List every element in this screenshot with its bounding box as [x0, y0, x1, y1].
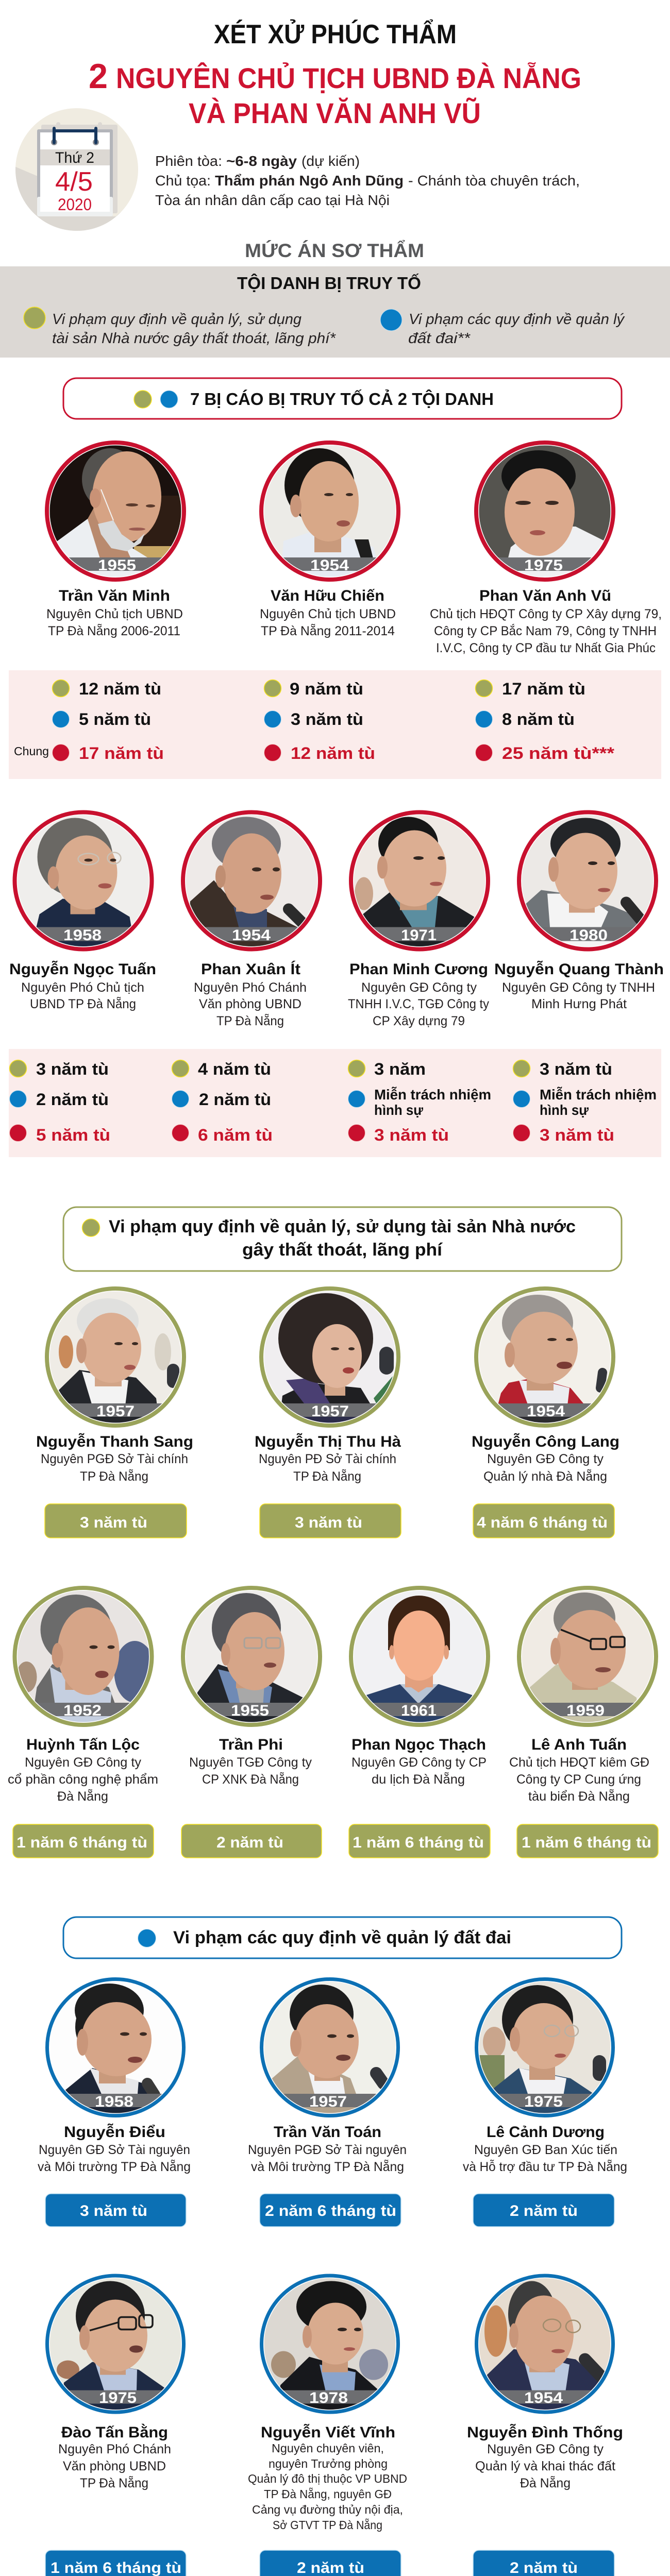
role: [509, 1755, 649, 1804]
portrait photo: [261, 1289, 398, 1426]
role: Nguyên Chủ tịch UBND: [260, 607, 396, 621]
role: [463, 2143, 627, 2174]
portrait photo: [476, 2276, 613, 2412]
sentence badge: [260, 2550, 401, 2576]
session info text: Chủ tọa:: [155, 173, 211, 189]
role: Công ty CP Cung ứng: [516, 1772, 641, 1787]
sentence badge: [260, 2194, 401, 2227]
portrait photo: [14, 1588, 156, 1725]
section header: state asset violations: Vi phạm quy định về quản lý, sử dụng tài sản Nhà nước: [109, 1217, 576, 1236]
birth year: 1955: [231, 1702, 269, 1719]
portrait photo: [183, 812, 320, 949]
role: CP Xây dựng 79: [373, 1014, 465, 1028]
role: TP Đà Nẵng 2006-2011: [48, 623, 180, 638]
role: cổ phần công nghệ phẩm: [8, 1772, 158, 1787]
role: Nguyên GĐ Công ty: [361, 980, 477, 995]
role: Nguyên Chủ tịch UBND: [46, 607, 183, 621]
person: Lê Cảnh Dương: [463, 1979, 627, 2227]
birth year: 1954: [310, 557, 349, 574]
name: Nguyễn Quang Thành: [494, 960, 664, 978]
sentence badge: 4 năm 6 tháng tù: [477, 1514, 608, 1531]
role: tàu biển Đà Nẵng: [528, 1789, 630, 1804]
role: Đà Nẵng: [57, 1789, 108, 1804]
person: Phan Minh Cương: [348, 812, 489, 1028]
role: Quản lý nhà Đà Nẵng: [483, 1469, 607, 1484]
person: Phan Ngọc Thạch: [349, 1588, 490, 1858]
person: Nguyễn Thị Thu Hà: [255, 1289, 401, 1538]
name: Nguyễn Điểu: [64, 2123, 165, 2141]
sentence badge: 3 năm tù: [80, 2202, 147, 2219]
role: Nguyên GĐ Công ty: [25, 1755, 142, 1770]
role: Cảng vụ đường thủy nội địa,: [252, 2503, 403, 2516]
sentences: Trần Văn Minh: 17 năm tù: [79, 744, 164, 762]
role: Nguyên Phó Chánh: [194, 980, 307, 995]
sentence badge: 3 năm tù: [295, 1514, 362, 1531]
role: Nguyên GĐ Ban Xúc tiến: [474, 2143, 617, 2157]
role: [194, 980, 307, 1028]
sentences: Trần Văn Minh: 12 năm tù: [79, 680, 161, 698]
role: [483, 1452, 607, 1484]
person: Đào Tấn Bằng: [45, 2276, 186, 2576]
birth year: 1952: [63, 1702, 102, 1719]
section header: state asset violations: [63, 1207, 622, 1271]
sentence badge: 1 năm 6 tháng tù: [353, 1834, 484, 1851]
name: Lê Cảnh Dương: [487, 2124, 605, 2141]
person: Nguyễn Đình Thống: [467, 2276, 623, 2576]
role: [189, 1755, 312, 1787]
role: Nguyên Phó Chủ tịch: [21, 980, 144, 995]
sentence badge: [260, 1504, 401, 1538]
sentences: Nguyễn Quang Thành: Miễn trách nhiệm: [540, 1087, 657, 1103]
role: Nguyên GĐ Công ty TNHH: [502, 980, 655, 995]
role: Nguyên GĐ Công ty: [487, 1452, 604, 1466]
birth year: 1959: [566, 1702, 605, 1719]
role: và Môi trường TP Đà Nẵng: [38, 2159, 191, 2174]
sentences: Phan Minh Cương: 3 năm: [374, 1060, 426, 1078]
role: Nguyên GĐ Công ty CP: [351, 1755, 487, 1770]
sentence badge: [45, 1504, 187, 1538]
session info text: - Chánh tòa chuyên trách,: [408, 173, 580, 189]
role: TP Đà Nẵng: [216, 1013, 284, 1028]
role: Nguyên chuyên viên,: [272, 2442, 384, 2455]
sentence badge: [473, 2194, 614, 2227]
session info text: Thẩm phán Ngô Anh Dũng: [215, 173, 404, 189]
person: Huỳnh Tấn Lộc: [8, 1588, 158, 1858]
sentences: Nguyễn Ngọc Tuấn: 2 năm tù: [36, 1090, 109, 1109]
portrait photo: [476, 443, 613, 580]
session info text: [155, 153, 580, 208]
birth year: 1954: [232, 927, 271, 944]
panel: charges legend: [0, 266, 670, 358]
person: Nguyễn Thanh Sang: [36, 1289, 193, 1538]
role: Sở GTVT TP Đà Nẵng: [273, 2518, 382, 2532]
person: Phan Xuân Ít: [183, 812, 320, 1028]
role: du lịch Đà Nẵng: [372, 1772, 465, 1787]
role: CP XNK Đà Nẵng: [202, 1772, 299, 1787]
birth year: 1958: [95, 2093, 133, 2110]
name: Nguyễn Thị Thu Hà: [255, 1433, 401, 1450]
role: [430, 607, 662, 655]
birth year: 1978: [309, 2389, 348, 2406]
icon: calendar: 4/5: [55, 167, 93, 197]
sentences: Nguyễn Quang Thành: hình sự: [540, 1102, 589, 1118]
sentences: Văn Hữu Chiến: 3 năm tù: [291, 710, 363, 728]
sentences: Phan Minh Cương: Miễn trách nhiệm: [374, 1087, 491, 1103]
title line: red 2: VÀ PHAN VĂN ANH VŨ: [189, 97, 481, 129]
sentence badge: [45, 2550, 186, 2576]
portrait photo: [262, 2276, 398, 2412]
name: Phan Ngọc Thạch: [351, 1736, 486, 1753]
birth year: 1980: [569, 927, 608, 944]
name: Nguyễn Viết Vĩnh: [261, 2424, 395, 2441]
sentences: Phan Văn Anh Vũ: 8 năm tù: [502, 710, 575, 728]
panel: charges legend: tài sản Nhà nước gây thất thoát, lãng phí*: [52, 330, 337, 347]
name: Phan Minh Cương: [349, 961, 488, 978]
role: TP Đà Nẵng 2011-2014: [261, 623, 395, 638]
portrait photo: [47, 443, 184, 580]
name: Phan Văn Anh Vũ: [479, 587, 611, 604]
icon: calendar: 2020: [58, 195, 92, 214]
sentences: Nguyễn Quang Thành: 3 năm tù: [540, 1126, 614, 1144]
sentence badge: [13, 1824, 154, 1858]
birth year: 1971: [401, 927, 437, 944]
sentences: Phan Văn Anh Vũ: 25 năm tù***: [502, 744, 615, 762]
panel: sentences, row of 3: [9, 670, 661, 779]
role: Nguyên GĐ Công ty: [487, 2442, 604, 2456]
sentences: Trần Văn Minh: 5 năm tù: [79, 710, 151, 728]
role: [8, 1755, 158, 1804]
birth year: 1961: [401, 1702, 437, 1719]
name: Trần Văn Toán: [274, 2124, 381, 2141]
sentence badge: 2 năm 6 tháng tù: [265, 2202, 396, 2219]
section header: land management violations: Vi phạm các quy định về quản lý đất đai: [173, 1928, 511, 1947]
birth year: 1975: [524, 557, 563, 574]
portrait photo: [351, 812, 488, 949]
title numeral: 2: [89, 57, 108, 96]
name: Đào Tấn Bằng: [61, 2424, 168, 2441]
role: [248, 2442, 407, 2532]
person: Trần Văn Minh: [46, 443, 184, 638]
role: Văn phòng UBND: [199, 997, 301, 1011]
role: Chủ tịch HĐQT kiêm GĐ: [509, 1755, 649, 1770]
section header: both charges: 7 BỊ CÁO BỊ TRUY TỐ CẢ 2 TỘI DANH: [190, 389, 494, 409]
sentences: Nguyễn Ngọc Tuấn: 3 năm tù: [36, 1060, 109, 1078]
heading: first-instance sentences: MỨC ÁN SƠ THẨM: [245, 240, 424, 261]
role: TNHH I.V.C, TGĐ Công ty: [348, 997, 489, 1011]
session info text: Phiên tòa:: [155, 153, 222, 169]
name: Trần Văn Minh: [59, 587, 170, 604]
sentence badge: 3 năm tù: [80, 1514, 147, 1531]
title line: black: XÉT XỬ PHÚC THẨM: [214, 19, 457, 49]
role: Nguyên TGĐ Công ty: [189, 1755, 312, 1770]
sentence badge: [349, 1824, 490, 1858]
role: TP Đà Nẵng, nguyên GĐ: [264, 2487, 392, 2501]
person: Nguyễn Ngọc Tuấn: [9, 812, 156, 1011]
birth year: 1954: [524, 2389, 563, 2406]
sentences: Phan Văn Anh Vũ: 17 năm tù: [502, 680, 585, 698]
section header: land management violations: [63, 1917, 622, 1958]
role: [260, 607, 396, 638]
role: [38, 2143, 191, 2174]
sentence badge: [473, 1504, 614, 1538]
sentences: Văn Hữu Chiến: 9 năm tù: [290, 680, 363, 698]
birth year: 1957: [309, 2093, 347, 2110]
sentence badge: 2 năm tù: [216, 1834, 283, 1851]
birth year: 1957: [311, 1403, 349, 1420]
person: Văn Hữu Chiến: [260, 443, 398, 638]
panel: charges legend: Vi phạm các quy định về quản lý: [409, 311, 625, 328]
birth year: 1975: [99, 2389, 137, 2406]
role: [248, 2143, 407, 2174]
sentences: Phan Minh Cương: [348, 1060, 491, 1144]
sentences: Phan Xuân Ít: 4 năm tù: [198, 1060, 271, 1078]
sentence badge: [181, 1824, 322, 1858]
role: Nguyên PĐ Sở Tài chính: [259, 1452, 396, 1466]
panel: sentences, row of 4: [9, 1049, 661, 1157]
birth year: 1975: [524, 2093, 563, 2110]
sentences: Phan Xuân Ít: 2 năm tù: [199, 1090, 271, 1109]
panel: charges legend: TỘI DANH BỊ TRUY TỐ: [237, 273, 421, 293]
sentence badge: 1 năm 6 tháng tù: [522, 1834, 651, 1851]
sentence badge: [517, 1824, 658, 1858]
role: TP Đà Nẵng: [293, 1469, 361, 1484]
person: Lê Anh Tuấn: [509, 1588, 658, 1858]
sentence badge: 2 năm tù: [510, 2202, 578, 2219]
name: Văn Hữu Chiến: [271, 587, 384, 604]
birth year: 1954: [527, 1403, 565, 1420]
role: I.V.C, Công ty CP đầu tư Nhất Gia Phúc: [436, 641, 656, 655]
role: [58, 2442, 171, 2490]
sentences: Phan Xuân Ít: [172, 1060, 273, 1144]
birth year: 1955: [98, 557, 136, 574]
role: [348, 980, 489, 1028]
birth year: 1958: [63, 927, 102, 944]
portrait photo: [476, 1979, 613, 2115]
sentence badge: 1 năm 6 tháng tù: [16, 1834, 147, 1851]
portrait photo: [262, 1979, 398, 2115]
portrait photo: [261, 443, 398, 580]
role: [259, 1452, 396, 1484]
person: Nguyễn Công Lang: [472, 1289, 619, 1538]
role: TP Đà Nẵng: [80, 2476, 148, 2490]
session info text: (dự kiến): [301, 153, 360, 169]
role: và Môi trường TP Đà Nẵng: [251, 2159, 404, 2174]
sentences: Nguyễn Quang Thành: [513, 1060, 657, 1144]
sentence badge: [473, 2550, 614, 2576]
portrait photo: [183, 1588, 320, 1725]
session info text: ~6-8 ngày: [226, 153, 297, 169]
person: Nguyễn Viết Vĩnh: [248, 2276, 407, 2576]
panel: charges legend: Vi phạm quy định về quản lý, sử dụng: [52, 311, 301, 328]
role: Quản lý và khai thác đất: [475, 2459, 615, 2473]
role: [502, 980, 655, 1011]
title line: red 1: NGUYÊN CHỦ TỊCH UBND ĐÀ NẴNG: [116, 62, 581, 94]
role: Nguyên PGĐ Sở Tài chính: [41, 1452, 188, 1466]
name: Nguyễn Thanh Sang: [36, 1433, 193, 1450]
role: TP Đà Nẵng: [80, 1469, 148, 1484]
panel: charges legend: đất đai**: [408, 330, 471, 347]
sentences: Phan Minh Cương: hình sự: [374, 1102, 424, 1118]
person: Nguyễn Điểu: [38, 1979, 191, 2227]
sentences: Trần Văn Minh: Chung: [14, 744, 49, 758]
portrait photo: [519, 812, 656, 949]
sentence badge: [45, 2194, 186, 2227]
portrait photo: [519, 1588, 656, 1725]
sentences: Nguyễn Quang Thành: 3 năm tù: [540, 1060, 612, 1078]
icon: calendar: Thứ 2: [55, 149, 94, 166]
role: Quản lý đô thị thuộc VP UBND: [248, 2472, 407, 2485]
portrait photo: [47, 2276, 183, 2412]
role: Chủ tịch HĐQT Công ty CP Xây dựng 79,: [430, 607, 662, 621]
role: [351, 1755, 487, 1787]
name: Huỳnh Tấn Lộc: [26, 1736, 140, 1753]
name: Nguyễn Ngọc Tuấn: [9, 960, 156, 978]
role: Công ty CP Bắc Nam 79, Công ty TNHH: [434, 623, 657, 638]
portrait photo: [47, 1289, 184, 1426]
icon: calendar: [15, 108, 138, 231]
role: Nguyên Phó Chánh: [58, 2442, 171, 2456]
person: Phan Văn Anh Vũ: [430, 443, 662, 655]
person: Nguyễn Quang Thành: [494, 812, 664, 1011]
sentences: Phan Văn Anh Vũ: [475, 680, 615, 762]
sentences: Phan Xuân Ít: 6 năm tù: [198, 1126, 273, 1144]
session info text: Tòa án nhân dân cấp cao tại Hà Nội: [155, 192, 390, 208]
sentences: Phan Minh Cương: 3 năm tù: [374, 1126, 449, 1144]
sentences: Trần Văn Minh: [14, 680, 164, 762]
person: Trần Phi: [181, 1588, 322, 1858]
role: [475, 2442, 615, 2490]
section header: state asset violations: gây thất thoát, lãng phí: [242, 1240, 443, 1260]
birth year: 1957: [96, 1403, 135, 1420]
role: [21, 980, 144, 1011]
role: Nguyên GĐ Sở Tài nguyên: [39, 2143, 190, 2157]
sentences: Văn Hữu Chiến: 12 năm tù: [291, 744, 375, 762]
portrait photo: [47, 1979, 183, 2115]
name: Lê Anh Tuấn: [531, 1736, 627, 1753]
person: Trần Văn Toán: [248, 1979, 407, 2227]
role: Đà Nẵng: [520, 2476, 571, 2490]
name: Nguyễn Công Lang: [472, 1433, 619, 1450]
name: Nguyễn Đình Thống: [467, 2424, 623, 2441]
title: [89, 19, 581, 129]
sentences: Nguyễn Ngọc Tuấn: 5 năm tù: [36, 1126, 110, 1144]
role: nguyên Trưởng phòng: [269, 2457, 388, 2470]
name: Trần Phi: [219, 1736, 283, 1753]
name: Phan Xuân Ít: [201, 960, 300, 978]
portrait photo: [476, 1289, 613, 1426]
section header: both charges: [63, 378, 622, 419]
role: Văn phòng UBND: [63, 2459, 166, 2473]
sentences: Văn Hữu Chiến: [264, 680, 375, 762]
portrait photo: silhouette: [351, 1588, 488, 1725]
role: [41, 1452, 188, 1484]
portrait photo: [14, 812, 152, 949]
role: Nguyên PGĐ Sở Tài nguyên: [248, 2143, 407, 2157]
role: Minh Hưng Phát: [531, 997, 627, 1011]
sentences: Nguyễn Ngọc Tuấn: [9, 1060, 110, 1144]
role: và Hỗ trợ đầu tư TP Đà Nẵng: [463, 2159, 627, 2174]
role: [46, 607, 183, 638]
role: UBND TP Đà Nẵng: [30, 996, 136, 1011]
